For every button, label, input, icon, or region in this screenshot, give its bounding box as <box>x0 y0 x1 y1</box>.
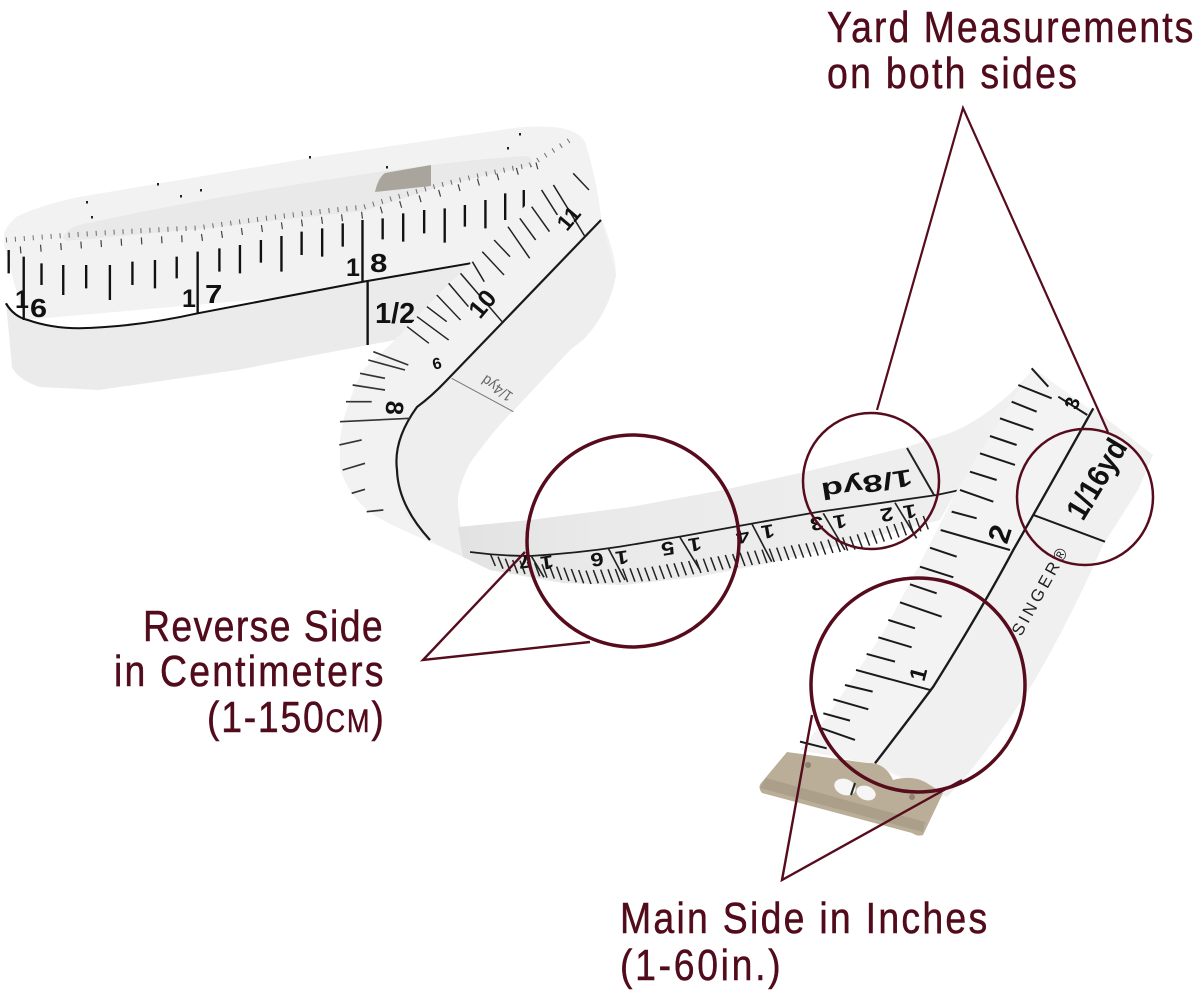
callout circle: yard reverse <box>803 413 939 549</box>
label: yard measurements: Yard Measurements <box>827 2 1193 52</box>
metal clip <box>375 165 431 192</box>
strip numerals: 1 <box>831 510 848 533</box>
tape reverse strip <box>458 370 1033 585</box>
coiled tape loop <box>4 126 601 390</box>
strip numerals: 2 <box>878 503 895 526</box>
strip numerals: 1 <box>687 533 703 556</box>
strip numerals: 1 <box>539 551 555 574</box>
strip centimeter line and ticks <box>470 490 960 584</box>
strip numerals: 5 <box>660 537 676 560</box>
label: main side <box>620 893 987 990</box>
1/16yd label: 1/16yd <box>1059 432 1134 526</box>
1/8yd label: 1/8yd <box>819 463 914 504</box>
numerals 16 17 18: 1/2 <box>375 298 415 330</box>
pointer lines: yard <box>877 108 1108 432</box>
tape middle band: 1/4yd <box>479 371 516 405</box>
main tape strip <box>800 368 1153 797</box>
label: main side: (1-60in.) <box>620 940 781 990</box>
band ruler ticks <box>407 173 589 343</box>
label: yard measurements <box>827 2 1193 98</box>
callout circle: inches <box>811 578 1025 792</box>
pointer lines: reverse side <box>423 552 590 660</box>
numerals 16 17 18: 1 <box>15 286 29 314</box>
front band, lower part <box>6 263 470 390</box>
numerals 16 17 18 <box>15 249 415 330</box>
numerals 16 17 18: 7 <box>205 280 222 309</box>
strip numerals: 1 <box>901 500 918 523</box>
main tape strip: 3 <box>1061 395 1085 412</box>
label: reverse side: Reverse Side <box>143 601 383 651</box>
numerals 1 2 3: 2 <box>982 521 1019 547</box>
strip numerals <box>517 500 918 574</box>
strip numerals: 7 <box>517 550 533 573</box>
label: yard measurements: on both sides <box>827 48 1077 98</box>
front band ruler <box>6 190 524 345</box>
numerals 16 17 18: 6 <box>30 294 47 323</box>
tape middle band <box>339 142 616 557</box>
label: reverse side: (1-150CM) <box>207 692 384 742</box>
label: reverse side <box>114 601 384 742</box>
numerals 16 17 18: 1 <box>346 254 360 282</box>
pointer lines: main side <box>782 715 962 880</box>
tape middle band: 11 <box>552 201 586 235</box>
strip numerals: 1 <box>614 546 630 569</box>
tape middle band: 9 <box>430 353 443 372</box>
SINGER brand: SINGER® <box>1008 544 1072 639</box>
numerals 16 17 18: 8 <box>370 249 387 278</box>
band numerals: 10 <box>463 285 502 324</box>
numerals 16 17 18: 1 <box>182 285 196 313</box>
label: reverse side: in Centimeters <box>114 646 383 696</box>
strip numerals: 1 <box>759 520 776 543</box>
strip numerals: 4 <box>734 525 751 548</box>
strip numerals: 3 <box>808 512 825 535</box>
strip numerals: 6 <box>589 548 605 571</box>
inch scale <box>800 368 1105 763</box>
label: main side: Main Side in Inches <box>620 893 987 943</box>
main tape strip: 1 <box>904 664 932 684</box>
callout circle: reverse side <box>527 435 739 647</box>
tape middle band: 8 <box>379 400 409 416</box>
callout circle: yard main <box>1017 429 1153 565</box>
metal tip <box>760 752 943 836</box>
